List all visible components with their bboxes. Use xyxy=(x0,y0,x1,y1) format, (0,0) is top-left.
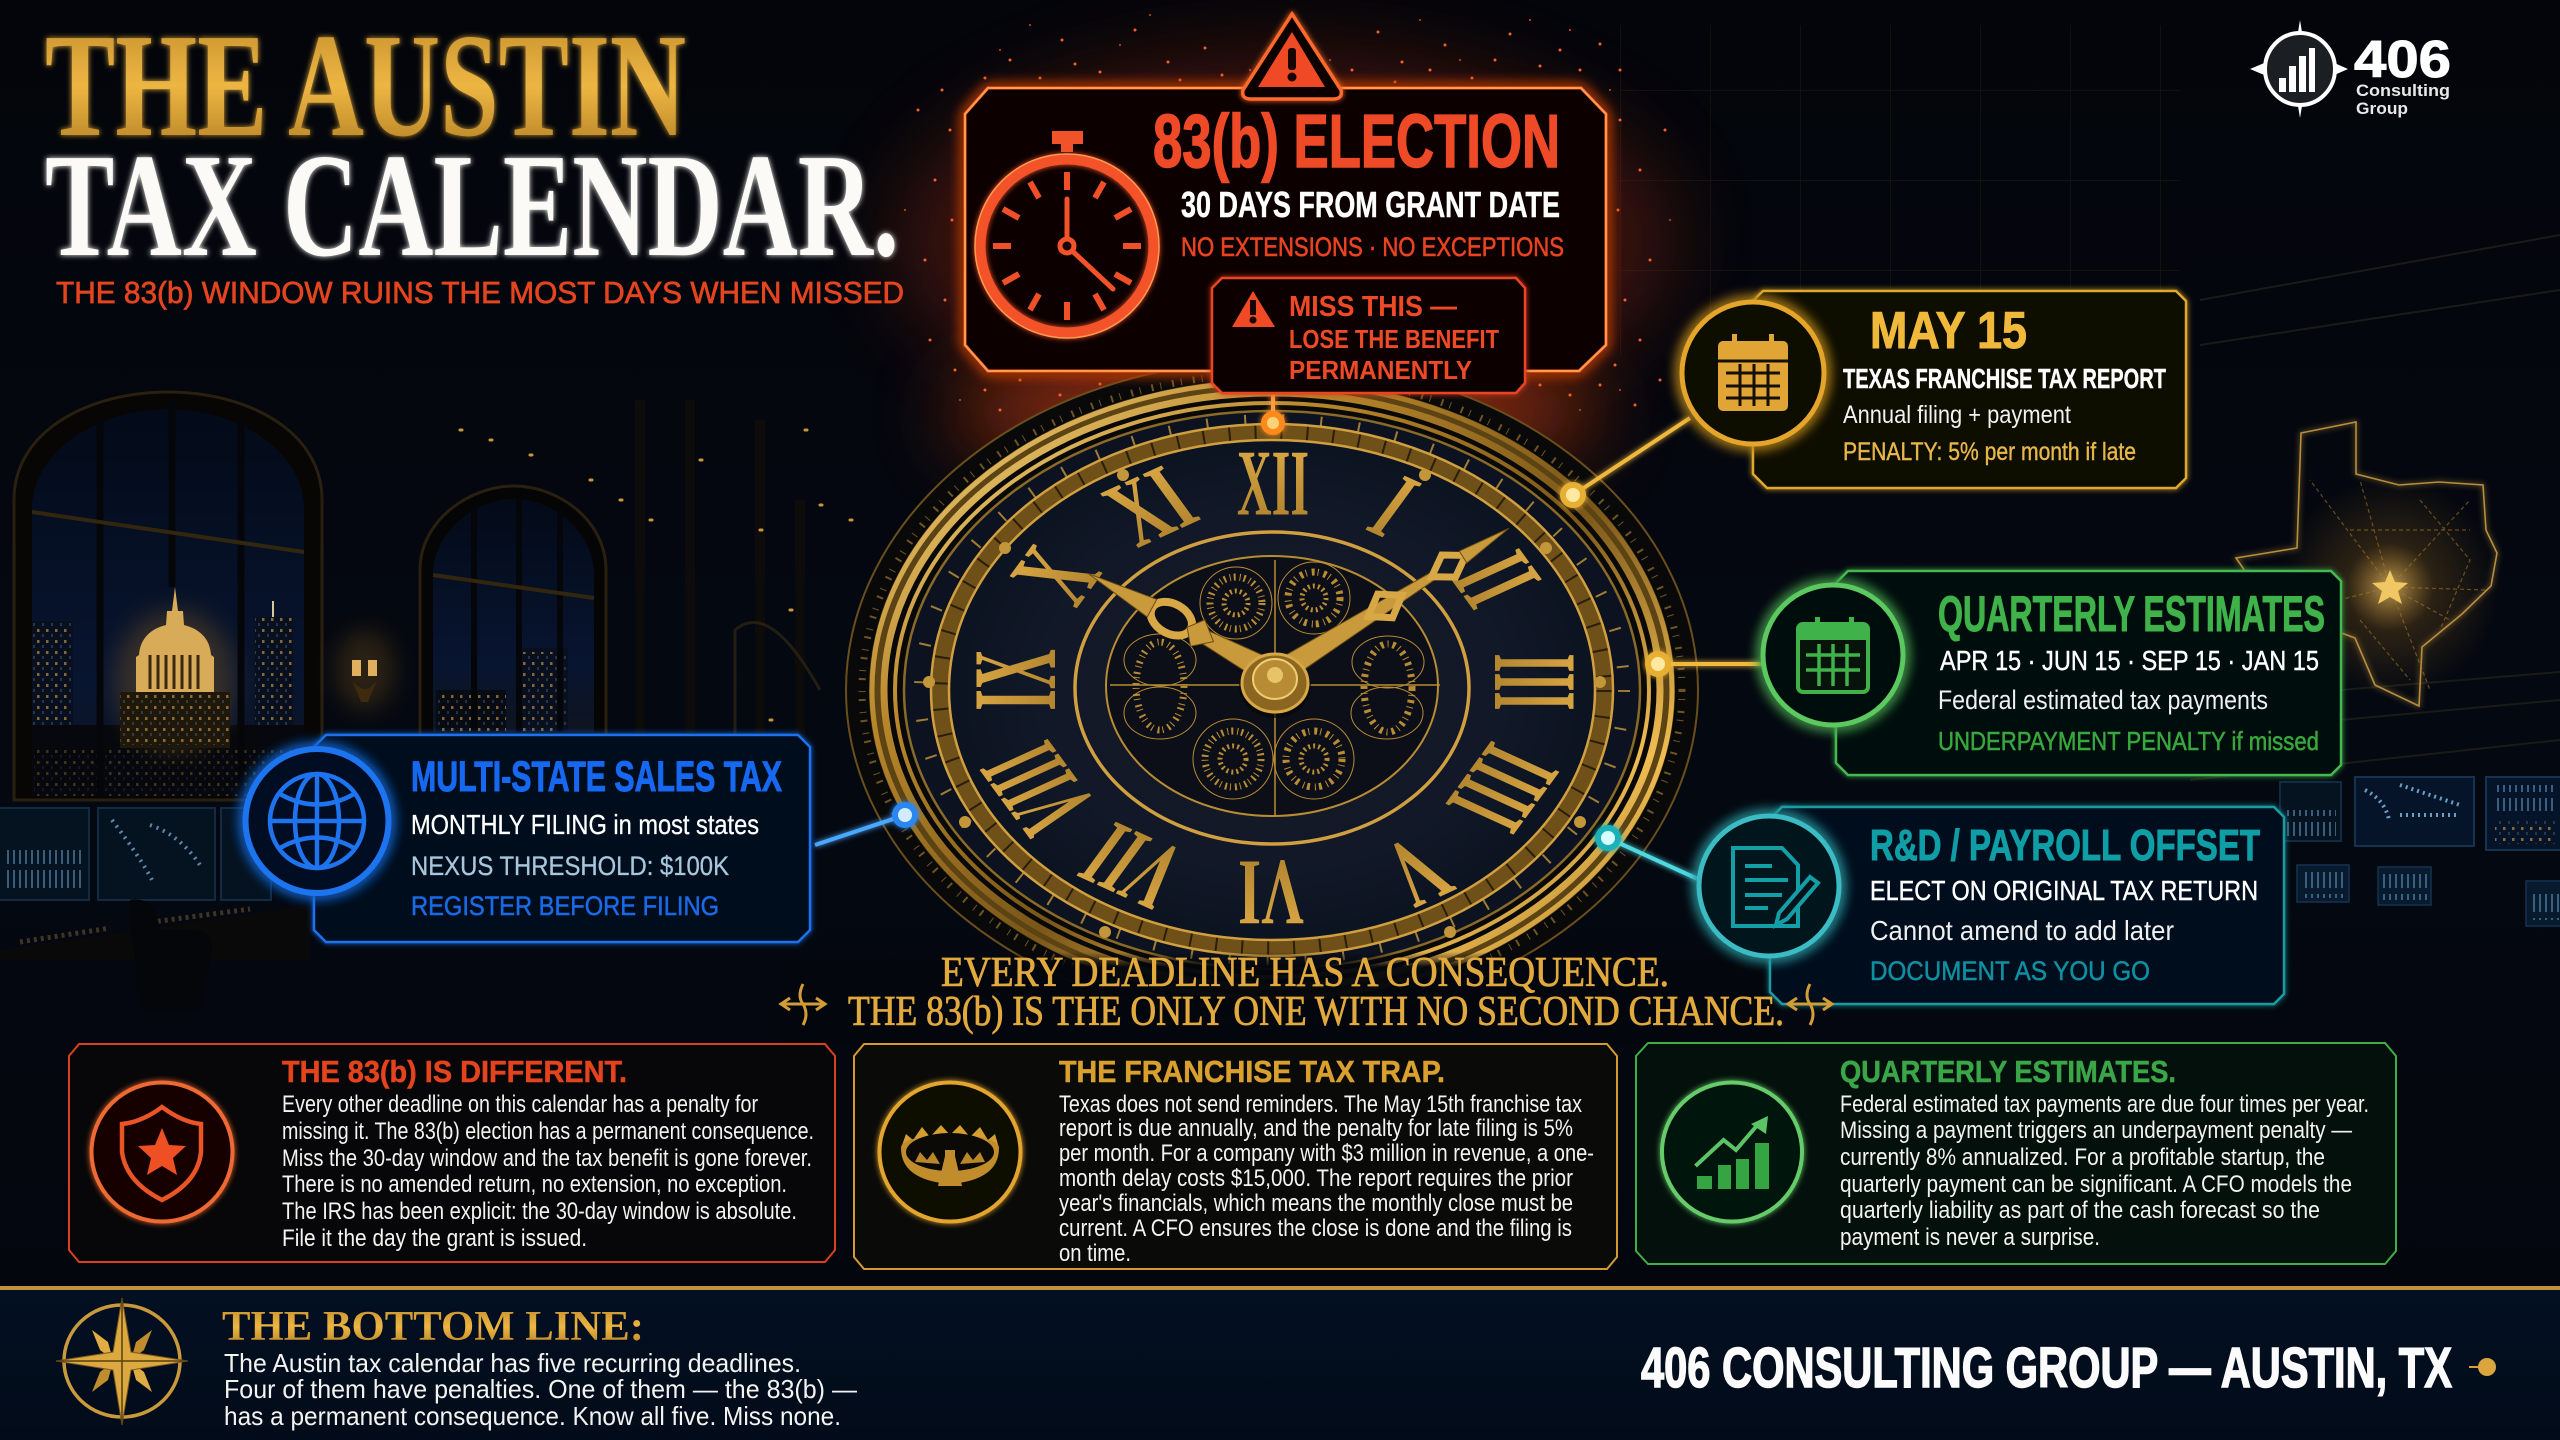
clock roman numerals xyxy=(950,431,1600,945)
panel: quarterly estimates: APR 15 · JUN 15 · SEP 15 · JAN 15 xyxy=(1940,645,2319,676)
icon: rising bar chart xyxy=(1662,1082,1802,1222)
body text: The IRS has been explicit: the 30-day window is absolute. xyxy=(282,1198,797,1225)
clock roman numerals: VI xyxy=(1238,840,1304,945)
callout: miss this: MISS THIS — xyxy=(1289,291,1457,323)
body text: Missing a payment triggers an underpayment penalty — xyxy=(1840,1117,2352,1144)
panel: May 15: TEXAS FRANCHISE TAX REPORT xyxy=(1843,363,2166,394)
panel: R&D payroll offset: DOCUMENT AS YOU GO xyxy=(1870,956,2150,986)
body text: missing it. The 83(b) election has a permanent consequence. xyxy=(282,1118,814,1145)
heading: THE BOTTOM LINE: xyxy=(222,1304,644,1350)
ornament: left flourish xyxy=(781,984,825,1025)
panel: May 15: PENALTY: 5% per month if late xyxy=(1843,438,2136,466)
connector: quarterly to clock xyxy=(1645,651,1768,677)
logo: 406 Consulting Group: Group xyxy=(2356,99,2408,118)
icon: bear trap xyxy=(880,1082,1020,1222)
body text: Miss the 30-day window and the tax benefit is gone forever. xyxy=(282,1145,812,1172)
clock roman numerals: XII xyxy=(1237,431,1309,536)
panel: quarterly estimates xyxy=(1763,571,2341,775)
panel: quarterly estimates detail: QUARTERLY ESTIMATES. xyxy=(1840,1054,2176,1089)
panel: the franchise tax trap: THE FRANCHISE TAX TRAP. xyxy=(1059,1054,1445,1089)
clock roman numerals: VII xyxy=(1061,803,1205,929)
clock hour hand xyxy=(1082,561,1282,688)
clock roman numerals: XI xyxy=(1084,446,1216,567)
clock outer rim xyxy=(846,360,1698,1020)
clock roman numerals: III xyxy=(1468,654,1600,710)
clock hub xyxy=(1239,654,1311,718)
connector: R&D to clock xyxy=(1595,825,1700,880)
body text xyxy=(1059,1091,1594,1267)
body text: report is due annually, and the penalty for late filing is 5% xyxy=(1059,1115,1573,1142)
panel: May 15: MAY 15 xyxy=(1870,302,2027,360)
icon: stopwatch xyxy=(975,131,1159,338)
body text: Four of them have penalties. One of them — the 83(b) — xyxy=(224,1374,857,1404)
panel: R&D payroll offset xyxy=(1699,807,2284,1004)
gold end dot xyxy=(2469,1358,2496,1376)
body text: Texas does not send reminders. The May 15th franchise tax xyxy=(1059,1091,1582,1118)
panel: multi-state sales tax: REGISTER BEFORE FILING xyxy=(411,891,719,921)
heading: 83(b) ELECTION xyxy=(1153,99,1560,183)
clock roman numerals: II xyxy=(1427,536,1566,622)
icon: document and pen xyxy=(1699,816,1839,956)
clock minute hand xyxy=(1268,516,1516,687)
body text: Every other deadline on this calendar has a penalty for xyxy=(282,1091,758,1118)
body text: File it the day the grant is issued. xyxy=(282,1225,587,1252)
clock xyxy=(846,360,1698,1020)
body text xyxy=(282,1091,814,1252)
callout: miss this xyxy=(1212,278,1525,393)
clock minute ticks and chapter ring xyxy=(920,420,1624,960)
icon: gold calendar xyxy=(1682,302,1824,444)
body text: year's financials, which means the monthly close must be xyxy=(1059,1190,1573,1217)
panel: the 83(b) is different: THE 83(b) IS DIFFERENT. xyxy=(282,1054,627,1089)
panel: multi-state sales tax xyxy=(246,735,810,942)
panel: the franchise tax trap xyxy=(854,1044,1617,1269)
icon: globe xyxy=(246,749,388,893)
subtitle: THE 83(b) WINDOW RUINS THE MOST DAYS WHEN MISSED xyxy=(56,275,904,310)
panel: R&D payroll offset: R&D / PAYROLL OFFSET xyxy=(1870,821,2260,870)
body text: current. A CFO ensures the close is done and the filing is xyxy=(1059,1215,1572,1242)
title line 1: THE AUSTIN xyxy=(45,4,686,168)
caption: every deadline has a consequence: THE 83(b) IS THE ONLY ONE WITH NO SECOND CHANCE. xyxy=(848,989,1784,1035)
clock roman numerals: V xyxy=(1362,817,1471,927)
caption: every deadline has a consequence xyxy=(781,950,1832,1035)
icon: shield with star xyxy=(92,1082,232,1222)
logo: 406 Consulting Group: Consulting xyxy=(2356,81,2450,100)
icon: compass chart xyxy=(2250,20,2348,118)
panel: the 83(b) is different xyxy=(69,1044,835,1262)
logo: 406 Consulting Group xyxy=(2250,20,2451,118)
right trading desk monitors xyxy=(2280,777,2560,926)
clock rivets xyxy=(923,469,1606,938)
clock center medallion xyxy=(1075,532,1469,844)
panel: May 15 xyxy=(1682,291,2186,488)
icon: warning triangle xyxy=(1243,14,1341,99)
body text: per month. For a company with $3 million in revenue, a one- xyxy=(1059,1140,1594,1167)
body text: The Austin tax calendar has five recurring deadlines. xyxy=(224,1348,801,1378)
icon: green calendar xyxy=(1763,585,1903,725)
panel: quarterly estimates detail xyxy=(1636,1043,2396,1264)
body text: quarterly payment can be significant. A CFO models the xyxy=(1840,1171,2352,1198)
deadline: 30 DAYS FROM GRANT DATE xyxy=(1181,184,1560,225)
panel: multi-state sales tax: NEXUS THRESHOLD: $100K xyxy=(411,851,729,881)
body text xyxy=(1840,1091,2369,1251)
note: NO EXTENSIONS · NO EXCEPTIONS xyxy=(1181,232,1564,262)
clock roman numerals: IX xyxy=(950,649,1082,711)
left trading desk monitors xyxy=(0,808,310,1010)
logo: 406 Consulting Group: 406 xyxy=(2354,31,2451,89)
footer band xyxy=(0,1286,2560,1440)
title line 2: TAX CALENDAR. xyxy=(45,124,899,288)
body text: has a permanent consequence. Know all five. Miss none. xyxy=(224,1401,841,1431)
austin window: left arch with capitol xyxy=(14,392,322,800)
clock roman numerals: IIII xyxy=(1421,729,1584,847)
panel: quarterly estimates: UNDERPAYMENT PENALTY if missed xyxy=(1938,726,2319,756)
body text xyxy=(224,1348,857,1431)
panel: multi-state sales tax: MULTI-STATE SALES TAX xyxy=(411,753,782,801)
ornament: right flourish xyxy=(1788,984,1832,1025)
body text: month delay costs $15,000. The report requires the prior xyxy=(1059,1165,1573,1192)
wall sconce xyxy=(335,630,395,710)
panel: quarterly estimates: QUARTERLY ESTIMATES xyxy=(1938,586,2325,642)
caption: every deadline has a consequence: EVERY DEADLINE HAS A CONSEQUENCE. xyxy=(941,950,1669,996)
body text: quarterly liability as part of the cash forecast so the xyxy=(1840,1197,2320,1224)
body text: currently 8% annualized. For a profitable startup, the xyxy=(1840,1144,2325,1171)
body text: on time. xyxy=(1059,1240,1131,1267)
title xyxy=(45,4,904,310)
body text: Federal estimated tax payments are due four times per year. xyxy=(1840,1091,2369,1118)
body text: There is no amended return, no extension, no exception. xyxy=(282,1171,787,1198)
connector: multi-state to clock xyxy=(815,802,918,845)
austin window: second arch xyxy=(420,486,606,735)
texas map xyxy=(2236,422,2500,706)
callout: miss this: PERMANENTLY xyxy=(1289,355,1472,385)
clock roman numerals: I xyxy=(1350,457,1437,556)
clock roman numerals: VIII xyxy=(955,727,1122,850)
icon: gold compass xyxy=(56,1298,188,1425)
callout: miss this: LOSE THE BENEFIT xyxy=(1289,324,1499,354)
panel: R&D payroll offset: ELECT ON ORIGINAL TAX RETURN xyxy=(1870,875,2258,906)
red glow and sparks behind 83(b) panel xyxy=(895,15,1675,470)
panel: May 15: Annual filing + payment xyxy=(1843,401,2071,429)
fade below clock xyxy=(780,952,1780,1044)
connector: May 15 to clock xyxy=(1560,418,1690,508)
panel: R&D payroll offset: Cannot amend to add later xyxy=(1870,915,2174,946)
connector: 83(b) to clock xyxy=(1261,393,1285,435)
panel: quarterly estimates: Federal estimated tax payments xyxy=(1938,685,2268,715)
panel: 83(b) election xyxy=(965,14,1606,393)
body text: payment is never a surprise. xyxy=(1840,1224,2100,1251)
panel: multi-state sales tax: MONTHLY FILING in most states xyxy=(411,809,759,840)
clock roman numerals: X xyxy=(985,531,1126,620)
